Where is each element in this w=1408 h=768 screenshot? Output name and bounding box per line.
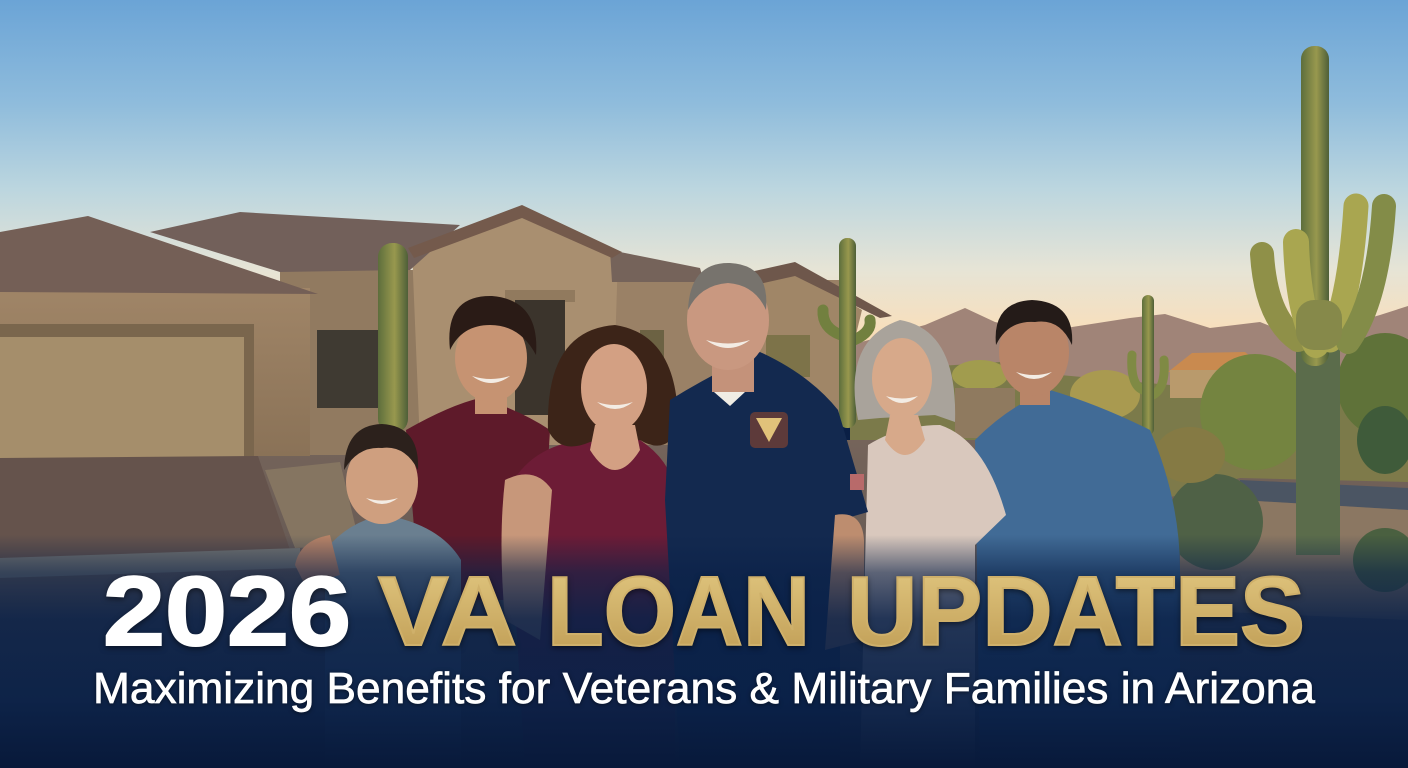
title: VA: [378, 556, 517, 666]
large saguaro cactus: [1262, 46, 1384, 555]
young man right: [975, 300, 1180, 768]
title: LOAN: [547, 556, 810, 666]
house walls: [280, 270, 420, 455]
bottom navy gradient overlay: [0, 535, 1408, 768]
flag patch: [850, 474, 864, 490]
sky: [0, 0, 1408, 345]
title: 2026: [103, 556, 351, 666]
window right: [766, 335, 810, 377]
curb: [0, 548, 300, 578]
veteran father: [665, 263, 868, 768]
older woman: [855, 320, 1006, 768]
house: [0, 205, 892, 460]
subtitle: Maximizing Benefits for Veterans & Military Families in Arizona: [93, 664, 1316, 713]
planter: [265, 462, 360, 548]
young boy: [295, 424, 461, 768]
family group: [295, 263, 1180, 768]
background shrubs and neighbouring house: [952, 333, 1408, 592]
mother: [502, 325, 678, 768]
roofs: [150, 212, 460, 272]
teen boy: [406, 296, 550, 600]
garage door: [0, 324, 254, 460]
desert background and ground: [0, 362, 1408, 768]
driveway: [0, 456, 290, 558]
cactus by house: [378, 238, 1164, 435]
entry: [505, 290, 575, 302]
title: [103, 556, 1305, 666]
window left: [317, 330, 379, 408]
distant mountains: [850, 306, 1408, 445]
title: UPDATES: [847, 556, 1305, 666]
shirt emblem: [750, 412, 788, 448]
